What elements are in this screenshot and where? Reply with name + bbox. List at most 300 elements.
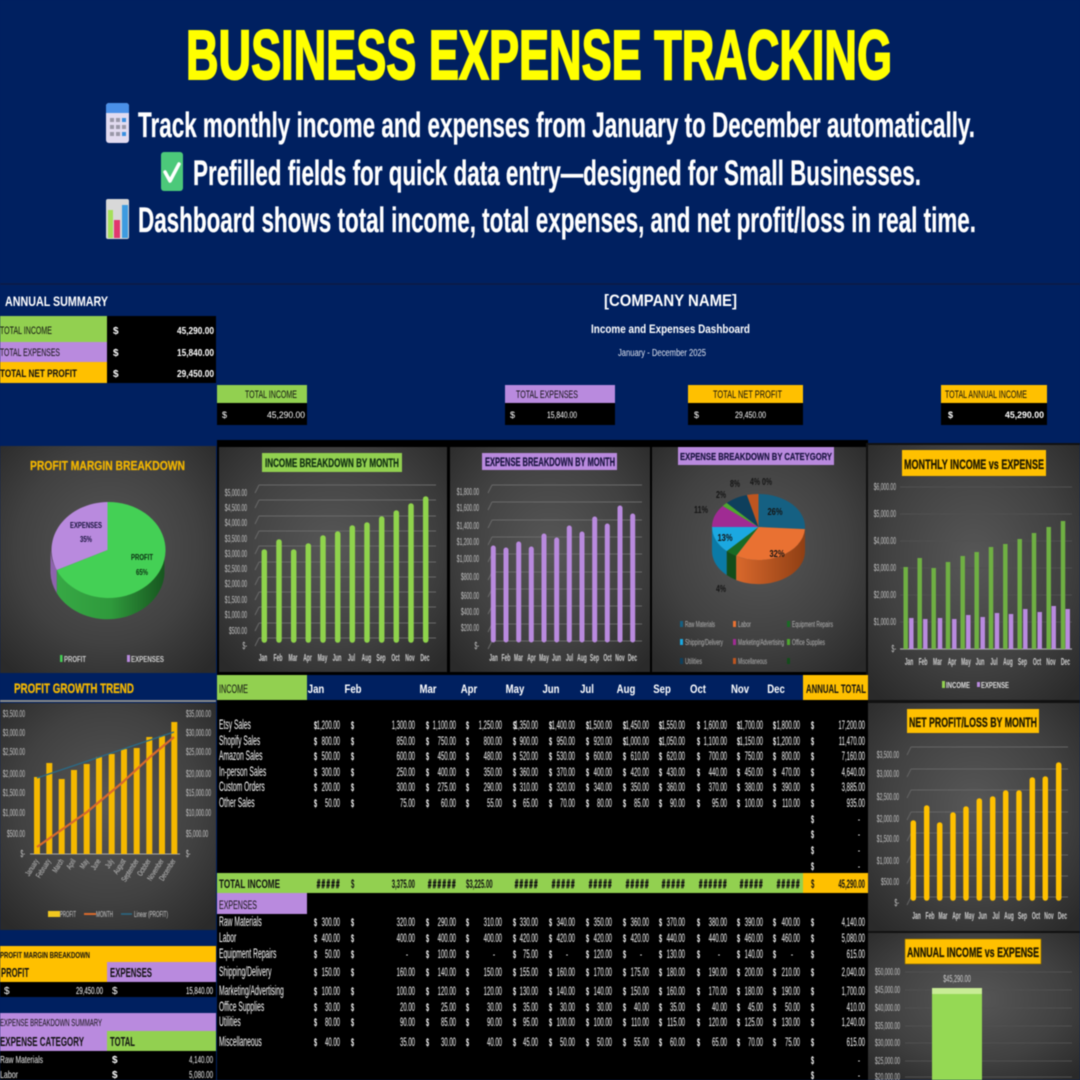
row: In-person Sales: 400.00 xyxy=(594,766,612,780)
row: Other Sales: 100.00 xyxy=(745,797,763,811)
row: total income: ##### xyxy=(626,878,650,892)
month labels: Jan xyxy=(912,910,921,922)
row: Custom Orders: 310.00 xyxy=(520,781,538,795)
row: Other Sales xyxy=(219,796,865,811)
row: Shipping/Delivery: Shipping/Delivery xyxy=(219,965,272,980)
pie chart: expense categories xyxy=(694,477,805,595)
axis labels: $1,000.00 xyxy=(874,616,896,628)
row: Office Supplies: 35.00 xyxy=(523,1001,538,1015)
month labels: Mar xyxy=(289,652,297,664)
annual summary: $ xyxy=(113,326,119,337)
rotated month labels: April xyxy=(65,858,78,871)
month labels: Jan xyxy=(905,656,913,668)
row: Shopify Sales: 1,200.00 xyxy=(777,735,800,749)
axis labels: $1,600.00 xyxy=(457,502,479,514)
axis labels: $5,000.00 xyxy=(225,487,247,499)
right axis labels: $15,000.00 xyxy=(186,787,211,799)
card: total income: 45,290.00 xyxy=(267,410,305,420)
row: Shopify Sales: 900.00 xyxy=(520,735,538,749)
row: Miscellaneous: 40.00 xyxy=(325,1036,340,1050)
row: Labor: 5,080.00 xyxy=(842,932,865,946)
row: Utilities: 115.00 xyxy=(667,1016,685,1030)
row: Other Sales: 65.00 xyxy=(523,797,538,811)
row: total income: ##### xyxy=(589,878,613,892)
legend: Labor xyxy=(738,620,751,629)
axis labels: $45,000.00 xyxy=(875,984,900,996)
table header: Nov xyxy=(731,683,749,696)
row: Labor: 420.00 xyxy=(520,932,538,946)
row: Amazon Sales: 7,160.00 xyxy=(842,750,865,764)
bars xyxy=(493,508,633,640)
right axis labels: $5,000.00 xyxy=(186,828,209,840)
row: Other Sales: 935.00 xyxy=(847,797,865,811)
row: Office Supplies: 40.00 xyxy=(712,1001,727,1015)
row: Miscellaneous: 615.00 xyxy=(847,1036,865,1050)
expense bars xyxy=(911,606,1068,649)
axis labels: $200.00 xyxy=(461,622,479,634)
row: Raw Materials: 360.00 xyxy=(631,916,649,930)
row: Etsy Sales: 1,300.00 xyxy=(392,719,415,733)
row: Office Supplies: 25.00 xyxy=(441,1001,456,1015)
row: Utilities: 90.00 xyxy=(487,1016,502,1030)
pie chart: expense categories: 13% xyxy=(718,533,733,544)
heading: dashboard name: Income and Expenses Dashboard xyxy=(591,322,750,336)
month labels: Oct xyxy=(391,652,400,664)
month labels: Feb xyxy=(502,652,511,664)
card: total expenses xyxy=(505,385,615,425)
table header: Apr xyxy=(461,683,478,696)
row: Raw Materials: 290.00 xyxy=(438,916,456,930)
card: total expenses: 15,840.00 xyxy=(547,410,577,420)
table: profit margin breakdown xyxy=(0,946,216,997)
right axis labels: $10,000.00 xyxy=(186,807,211,819)
axis labels: $2,000.00 xyxy=(874,589,896,601)
row: Raw Materials: 390.00 xyxy=(745,916,763,930)
axis labels: $1,000.00 xyxy=(225,609,247,621)
row: Custom Orders: 350.00 xyxy=(631,781,649,795)
trend line: linear profit xyxy=(37,732,174,778)
row: Amazon Sales: 750.00 xyxy=(745,750,763,764)
card: total expenses: TOTAL EXPENSES xyxy=(516,389,578,401)
panel: profit margin breakdown xyxy=(0,446,216,673)
table: profit margin breakdown: PROFIT xyxy=(1,965,29,980)
rotated month labels: January xyxy=(24,857,41,878)
row: Utilities: 125.00 xyxy=(745,1016,763,1030)
table: expense breakdown summary: Raw Materials xyxy=(0,1054,43,1066)
row: Other Sales: 110.00 xyxy=(782,797,800,811)
row: total income: $ xyxy=(351,878,355,892)
row: Amazon Sales: Amazon Sales xyxy=(219,749,262,764)
row: Etsy Sales: 1,250.00 xyxy=(479,719,502,733)
row: Raw Materials: 320.00 xyxy=(397,916,415,930)
month labels: Apr xyxy=(527,652,536,664)
row: Miscellaneous xyxy=(219,1035,865,1050)
row: Shipping/Delivery: $$$$$$$$$$$$$ xyxy=(314,966,814,979)
rotated month labels: October xyxy=(136,857,153,878)
panel: profit growth trend: PROFIT GROWTH TREND xyxy=(14,680,134,696)
table: profit margin breakdown: EXPENSES xyxy=(110,965,152,980)
row: Etsy Sales: 1,700.00 xyxy=(740,719,763,733)
row: Marketing/Advertising: $$$$$$$$$$$$$ xyxy=(314,985,814,998)
table header: Mar xyxy=(419,683,437,696)
axis labels: $- xyxy=(243,640,247,652)
income rows xyxy=(219,718,865,874)
card: total annual income: TOTAL ANNUAL INCOME xyxy=(945,389,1027,401)
row: total income: 45,290.00 xyxy=(838,878,865,892)
row: Labor: 460.00 xyxy=(782,932,800,946)
row: Custom Orders: $$$$$$$$$$$$$ xyxy=(314,781,814,794)
month labels: Jun xyxy=(978,910,987,922)
row: In-person Sales: 450.00 xyxy=(745,766,763,780)
month labels: May xyxy=(318,652,328,664)
card: total income: TOTAL INCOME xyxy=(245,389,297,401)
month labels: Aug xyxy=(362,652,371,664)
row: Marketing/Advertising: 100.00 xyxy=(322,985,340,999)
right axis labels: $20,000.00 xyxy=(186,768,211,780)
axis labels: $3,000.00 xyxy=(874,562,896,574)
pie chart: profit vs expenses: 65% xyxy=(136,568,148,577)
month labels: Dec xyxy=(1058,910,1067,922)
panel: profit growth trend xyxy=(0,675,216,930)
row: Custom Orders: 3,885.00 xyxy=(842,781,865,795)
icon: check mark xyxy=(161,152,183,191)
row: Amazon Sales: 450.00 xyxy=(438,750,456,764)
table: profit margin breakdown: $ xyxy=(112,986,118,997)
legend: INCOME xyxy=(946,681,970,690)
empty total cells: - xyxy=(858,844,860,858)
annual summary: ANNUAL SUMMARY xyxy=(5,293,108,309)
row: Shipping/Delivery: 180.00 xyxy=(667,966,685,980)
row: Equipment Repairs: 75.00 xyxy=(523,948,538,962)
panel: net profit/loss by month xyxy=(868,703,1080,931)
row: Equipment Repairs: 140.00 xyxy=(745,948,763,962)
bars xyxy=(913,765,1059,898)
row: Other Sales: 95.00 xyxy=(712,797,727,811)
row: Etsy Sales: 1,400.00 xyxy=(552,719,575,733)
table header: Dec xyxy=(767,683,785,696)
card: total annual income: 45,290.00 xyxy=(1005,410,1044,420)
axis labels: $500.00 xyxy=(229,625,247,637)
row: Shipping/Delivery: 210.00 xyxy=(782,966,800,980)
row: Labor: 400.00 xyxy=(484,932,502,946)
legend: Miscellaneous xyxy=(738,657,767,666)
row: Raw Materials: 400.00 xyxy=(782,916,800,930)
row: In-person Sales: 250.00 xyxy=(397,766,415,780)
row: Custom Orders: 370.00 xyxy=(709,781,727,795)
row: Custom Orders: 275.00 xyxy=(438,781,456,795)
axis labels: $1,500.00 xyxy=(877,833,899,845)
row: total income: ###### xyxy=(428,878,457,892)
axis labels xyxy=(875,966,900,1080)
annual summary: TOTAL INCOME xyxy=(0,325,52,337)
axis labels xyxy=(877,749,899,909)
row: Amazon Sales: 800.00 xyxy=(782,750,800,764)
axis labels: $- xyxy=(895,897,899,909)
row: Office Supplies: Office Supplies xyxy=(219,1000,264,1015)
empty total cells: $ xyxy=(811,860,814,873)
rotated month labels xyxy=(24,857,178,884)
row: Equipment Repairs: 50.00 xyxy=(325,948,340,962)
row: Miscellaneous: 30.00 xyxy=(441,1036,456,1050)
row: Utilities: 95.00 xyxy=(523,1016,538,1030)
panel: profit margin breakdown: PROFIT MARGIN BREAKDOWN xyxy=(30,458,185,473)
legend: EXPENSE xyxy=(981,681,1009,690)
axis labels: $4,000.00 xyxy=(874,535,896,547)
table: profit margin breakdown: 29,450.00 xyxy=(76,986,103,997)
right axis labels: $35,000.00 xyxy=(186,708,211,720)
row: Office Supplies: 30.00 xyxy=(597,1001,612,1015)
month labels: Jun xyxy=(333,652,342,664)
row: Labor: 400.00 xyxy=(438,932,456,946)
pie chart: expense categories: 2% xyxy=(716,490,726,501)
row: Amazon Sales: 610.00 xyxy=(631,750,649,764)
row: Equipment Repairs: $$$$$$$$$$$$$ xyxy=(314,948,814,961)
row: Shopify Sales: $$$$$$$$$$$$$ xyxy=(314,735,814,748)
pie chart: expense categories: 32% xyxy=(770,549,785,560)
table header xyxy=(217,675,868,700)
row: Office Supplies: 30.00 xyxy=(560,1001,575,1015)
axis labels: $30,000.00 xyxy=(875,1037,900,1049)
left axis labels: $2,000.00 xyxy=(3,768,25,780)
left axis labels: $500.00 xyxy=(7,828,25,840)
rotated month labels: June xyxy=(90,858,103,872)
axis labels: $25,000.00 xyxy=(875,1055,900,1067)
axis labels: $3,000.00 xyxy=(877,768,899,780)
row: Marketing/Advertising: 100.00 xyxy=(397,985,415,999)
row: Utilities: 100.00 xyxy=(594,1016,612,1030)
axis labels: $4,000.00 xyxy=(225,517,247,529)
row: Amazon Sales: 480.00 xyxy=(484,750,502,764)
row: Equipment Repairs: 120.00 xyxy=(594,948,612,962)
row: In-person Sales: 300.00 xyxy=(322,766,340,780)
pie chart: profit vs expenses xyxy=(50,502,166,619)
row: Amazon Sales xyxy=(219,749,865,764)
row: total income: ##### xyxy=(740,878,764,892)
row: Raw Materials: 4,140.00 xyxy=(842,916,865,930)
row: Raw Materials: 310.00 xyxy=(484,916,502,930)
row: Custom Orders: 340.00 xyxy=(594,781,612,795)
pie chart: profit vs expenses: PROFIT xyxy=(131,553,153,562)
table header: May xyxy=(506,683,524,696)
row: Etsy Sales: 1,100.00 xyxy=(433,719,456,733)
month labels: Sep xyxy=(376,652,386,664)
left axis labels: $1,000.00 xyxy=(3,807,25,819)
row: Equipment Repairs: - xyxy=(493,948,495,962)
axis labels: $2,500.00 xyxy=(877,791,899,803)
table header: Aug xyxy=(617,683,635,696)
legend xyxy=(680,620,833,666)
month labels: Dec xyxy=(1061,656,1070,668)
row: Shipping/Delivery: 160.00 xyxy=(397,966,415,980)
annual summary: 15,840.00 xyxy=(177,348,214,359)
row: Etsy Sales: 1,800.00 xyxy=(777,719,800,733)
annual summary: $ xyxy=(113,369,119,380)
row: Etsy Sales: 1,550.00 xyxy=(662,719,685,733)
row: Utilities: 110.00 xyxy=(631,1016,649,1030)
cell: expenses header: EXPENSES xyxy=(219,898,257,912)
legend: Office Supplies xyxy=(792,638,825,647)
row: Custom Orders: 200.00 xyxy=(322,781,340,795)
legend xyxy=(48,910,168,919)
row: In-person Sales: In-person Sales xyxy=(219,765,266,780)
row: total income: ##### xyxy=(662,878,686,892)
row: Shipping/Delivery: 170.00 xyxy=(594,966,612,980)
axis labels: $800.00 xyxy=(461,571,479,583)
pie chart: expense categories: 11% xyxy=(694,505,708,516)
row: Raw Materials xyxy=(219,915,865,930)
pie chart: profit vs expenses: EXPENSES xyxy=(70,521,102,530)
row: Equipment Repairs: 130.00 xyxy=(667,948,685,962)
row: Labor: 400.00 xyxy=(322,932,340,946)
month labels: Feb xyxy=(926,910,935,922)
row: Shopify Sales: 950.00 xyxy=(557,735,575,749)
row: Miscellaneous: 55.00 xyxy=(634,1036,649,1050)
legend xyxy=(942,681,1009,690)
row: Raw Materials: 340.00 xyxy=(557,916,575,930)
card: total net profit xyxy=(688,385,803,425)
axis labels xyxy=(225,487,247,652)
row: Other Sales: 55.00 xyxy=(487,797,502,811)
row: Equipment Repairs: - xyxy=(406,948,408,962)
row: Utilities: 90.00 xyxy=(400,1016,415,1030)
row: Labor: $$$$$$$$$$$$$ xyxy=(314,932,814,945)
row: Equipment Repairs: - xyxy=(718,948,720,962)
annual summary: 45,290.00 xyxy=(177,326,214,337)
rotated month labels: December xyxy=(158,857,178,883)
month labels xyxy=(912,910,1067,922)
month labels: Nov xyxy=(1046,656,1056,668)
row: Labor: 440.00 xyxy=(667,932,685,946)
month labels: Aug xyxy=(1003,656,1013,668)
right axis labels: $- xyxy=(186,848,191,860)
row: Utilities: 1,240.00 xyxy=(842,1016,865,1030)
row: Shopify Sales: 1,150.00 xyxy=(740,735,763,749)
axis labels: $2,000.00 xyxy=(877,813,899,825)
card: total income: $ xyxy=(222,410,227,420)
month labels: Nov xyxy=(1044,910,1054,922)
row: Marketing/Advertising: 140.00 xyxy=(594,985,612,999)
panel: expense breakdown by month xyxy=(450,447,650,672)
left axis labels xyxy=(3,708,25,860)
row: Equipment Repairs: 100.00 xyxy=(438,948,456,962)
rotated month labels: March xyxy=(51,858,66,874)
month labels: Jul xyxy=(990,656,998,668)
panel: income breakdown by month: INCOME BREAKDOWN BY MONTH xyxy=(265,456,399,470)
pie chart: expense categories: 8% xyxy=(730,479,740,490)
annual summary: $ xyxy=(113,348,119,359)
month labels: Jul xyxy=(348,652,355,664)
table header: Feb xyxy=(344,683,362,696)
month labels: Dec xyxy=(420,652,430,664)
panel: income breakdown by month xyxy=(219,447,447,672)
table header: ANNUAL TOTAL xyxy=(806,682,866,696)
row: Office Supplies: 45.00 xyxy=(748,1001,763,1015)
row: In-person Sales: 350.00 xyxy=(484,766,502,780)
month labels: Jan xyxy=(489,652,498,664)
annual summary xyxy=(0,293,216,383)
rotated month labels: August xyxy=(112,858,128,876)
left axis labels: $3,000.00 xyxy=(3,727,25,739)
axis labels: $4,500.00 xyxy=(225,502,247,514)
row: Amazon Sales: 500.00 xyxy=(322,750,340,764)
month labels: May xyxy=(539,652,549,664)
row: In-person Sales: $$$$$$$$$$$$$ xyxy=(314,766,814,779)
panel: expense breakdown by month: EXPENSE BREAKDOWN BY MONTH xyxy=(485,455,615,469)
row: Amazon Sales: 620.00 xyxy=(667,750,685,764)
row: Labor: 440.00 xyxy=(709,932,727,946)
table header: Jul xyxy=(580,683,594,696)
empty total cells below: - xyxy=(858,1054,860,1068)
empty total cells: - xyxy=(858,813,860,827)
row: Equipment Repairs: 615.00 xyxy=(847,948,865,962)
month labels: Oct xyxy=(1033,656,1041,668)
legend: Linear (PROFIT) xyxy=(134,910,168,919)
card: total net profit: 29,450.00 xyxy=(735,410,766,420)
row: total income: ##### xyxy=(515,878,539,892)
row: In-person Sales: 470.00 xyxy=(782,766,800,780)
annual summary: TOTAL EXPENSES xyxy=(0,347,60,359)
month labels: May xyxy=(965,910,975,922)
month labels: Jun xyxy=(552,652,561,664)
row: Utilities: 85.00 xyxy=(441,1016,456,1030)
month labels: Nov xyxy=(405,652,415,664)
table: expense breakdown summary: EXPENSE BREAKDOWN SUMMARY xyxy=(0,1018,102,1029)
row: Amazon Sales: 600.00 xyxy=(594,750,612,764)
legend: PROFIT xyxy=(64,655,86,664)
axis labels xyxy=(457,486,479,652)
row: Amazon Sales: $$$$$$$$$$$$$ xyxy=(314,750,814,763)
row: Raw Materials: $$$$$$$$$$$$$ xyxy=(314,916,814,929)
row: total income xyxy=(217,873,868,893)
legend: Raw Materials xyxy=(685,620,715,629)
row: Labor: 420.00 xyxy=(557,932,575,946)
month labels: Apr xyxy=(948,656,956,668)
axis labels: $500.00 xyxy=(881,876,899,888)
row: Marketing/Advertising: 160.00 xyxy=(667,985,685,999)
axis labels: $- xyxy=(475,640,479,652)
row: Etsy Sales: 1,600.00 xyxy=(704,719,727,733)
row: Shopify Sales: 850.00 xyxy=(397,735,415,749)
legend: PROFIT xyxy=(60,910,76,919)
left axis labels: $1,500.00 xyxy=(3,787,25,799)
income bar xyxy=(932,973,982,1080)
row: Amazon Sales: 520.00 xyxy=(520,750,538,764)
row: Labor: Labor xyxy=(219,931,237,946)
empty total cells below: $ xyxy=(811,1054,814,1067)
row: Raw Materials: 370.00 xyxy=(667,916,685,930)
axis labels: $3,500.00 xyxy=(877,749,899,761)
month labels: Feb xyxy=(919,656,928,668)
row: Shopify Sales: Shopify Sales xyxy=(219,734,260,749)
pie chart: expense categories: 0% xyxy=(762,477,772,488)
row: In-person Sales: 400.00 xyxy=(438,766,456,780)
row: Equipment Repairs: Equipment Repairs xyxy=(219,947,276,962)
row: Custom Orders xyxy=(219,780,865,795)
month labels: Jun xyxy=(976,656,985,668)
row: Custom Orders: 300.00 xyxy=(397,781,415,795)
row: Office Supplies: 40.00 xyxy=(634,1001,649,1015)
row: Shopify Sales: 11,470.00 xyxy=(839,735,865,749)
icon: bar chart xyxy=(106,199,129,239)
table header: Oct xyxy=(690,683,706,696)
legend xyxy=(60,655,164,664)
row: Custom Orders: 320.00 xyxy=(557,781,575,795)
table: expense breakdown summary: TOTAL xyxy=(110,1034,135,1049)
row: Miscellaneous: 45.00 xyxy=(523,1036,538,1050)
axis labels: $1,800.00 xyxy=(457,486,479,498)
empty total cells xyxy=(811,813,860,874)
row: Marketing/Advertising: 1,700.00 xyxy=(842,985,865,999)
